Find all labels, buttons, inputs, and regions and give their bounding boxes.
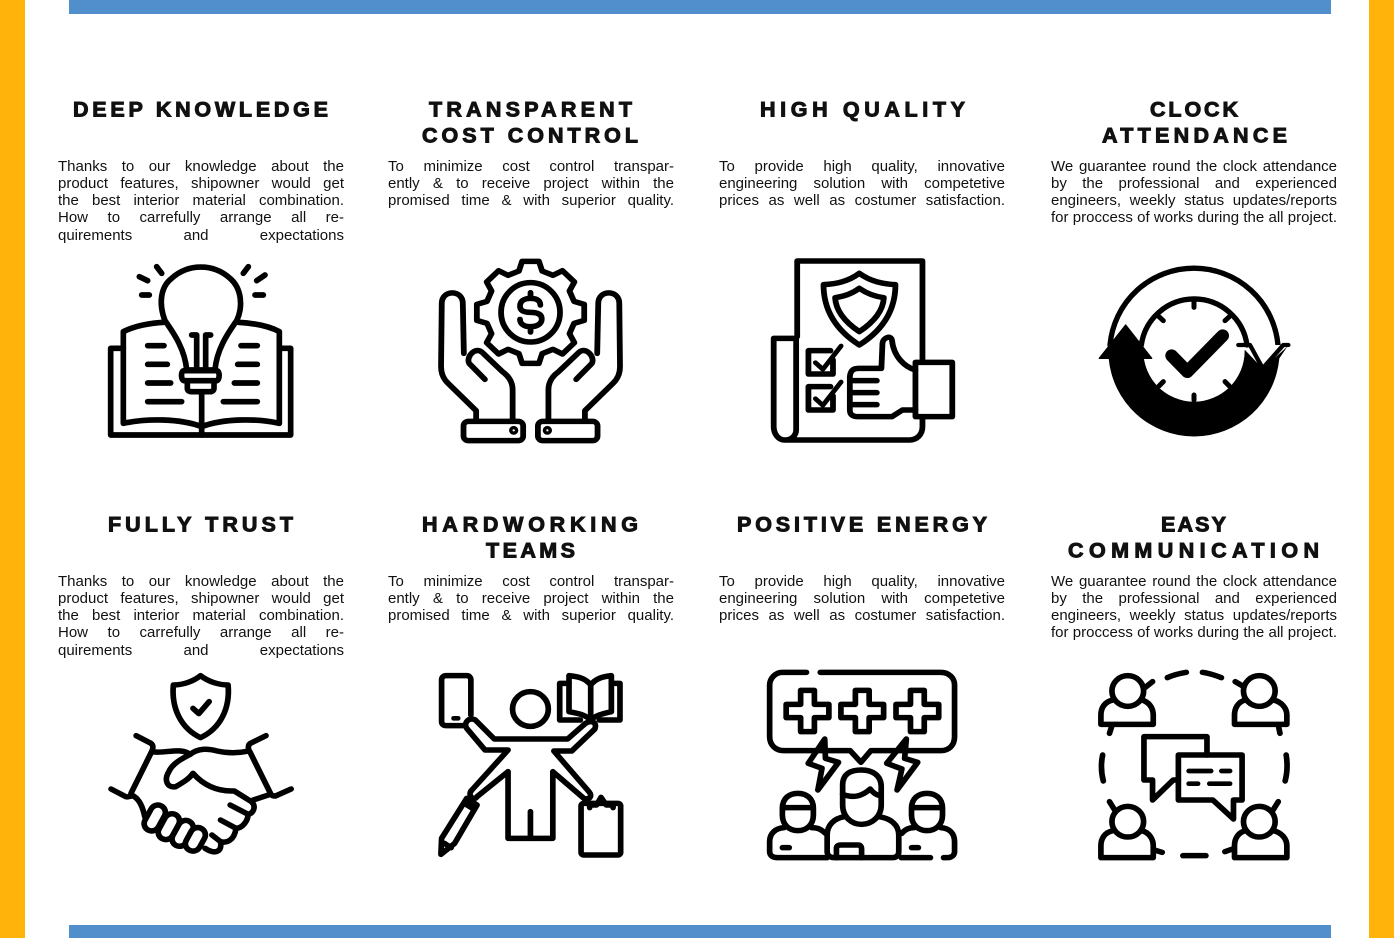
text: fully trust description: the best interior material combination.	[58, 607, 344, 624]
panel: easy communication	[1051, 513, 1337, 860]
text: positive energy description: To provide high quality, innovative	[719, 572, 1005, 590]
panel: transparent cost control	[388, 98, 674, 444]
icon: clock with check and circular arrows	[1098, 266, 1290, 436]
bottom blue band	[69, 925, 1331, 938]
heading: high quality: HIGH QUALITY	[760, 98, 965, 122]
panel: hardworking teams	[388, 513, 674, 858]
text: hardworking teams description: ently & to receive project within the	[388, 590, 674, 607]
heading: easy communication: EASY	[1161, 513, 1226, 537]
panel: clock attendance	[1051, 98, 1337, 436]
text: cost control description	[388, 158, 674, 209]
text: high quality description	[719, 158, 1005, 209]
icon: report with shield and thumbs up	[770, 258, 956, 443]
text: positive energy description: engineering solution with competetive	[719, 590, 1005, 607]
text: easy communication description: by the professional and experienced	[1051, 590, 1337, 607]
icon: handshake under shield	[108, 672, 294, 855]
left orange border	[0, 0, 25, 938]
panel: high quality	[719, 98, 1005, 443]
text: fully trust description: Thanks to our knowledge about the	[58, 572, 344, 590]
heading: transparent cost control	[422, 98, 638, 148]
text: fully trust description: product features, shipowner would get	[58, 590, 344, 607]
text: deep knowledge description: quirements and expectations	[58, 226, 344, 244]
heading: easy communication	[1068, 513, 1319, 563]
text: positive energy description: prices as well as costumer satisfaction.	[719, 607, 1005, 624]
icon: four people around chat bubbles	[1098, 670, 1290, 860]
text: hardworking teams description	[388, 572, 674, 624]
text: positive energy description	[719, 572, 1005, 624]
right orange border	[1369, 0, 1394, 938]
text: hardworking teams description: To minimize cost control transpar-	[388, 572, 674, 590]
heading: deep knowledge: DEEP KNOWLEDGE	[73, 98, 328, 122]
text: easy communication description: for proccess of works during the all project.	[1051, 624, 1337, 641]
text: fully trust description: quirements and expectations	[58, 642, 344, 658]
text: easy communication description: engineers, weekly status updates/reports	[1051, 607, 1337, 624]
text: high quality description: To provide high quality, innovative	[719, 158, 1005, 174]
heading: hardworking teams: TEAMS	[486, 539, 575, 563]
text: fully trust description: How to carrefully arrange all re-	[58, 624, 344, 641]
panel: positive energy	[719, 513, 1005, 860]
heading: clock attendance	[1102, 98, 1287, 148]
heading: transparent cost control: TRANSPARENT	[429, 98, 632, 122]
heading: easy communication: COMMUNICATION	[1068, 539, 1319, 563]
icon: hands holding dollar gear	[438, 258, 623, 444]
text: cost control description: To minimize cost control transpar-	[388, 158, 674, 174]
text: clock attendance description: for proccess of works during the all project.	[1051, 209, 1337, 226]
icon: light bulb over open book	[108, 264, 294, 438]
text: deep knowledge description: How to carrefully arrange all re-	[58, 209, 344, 226]
text: easy communication description: We guarantee round the clock attendance	[1051, 572, 1337, 590]
heading: fully trust: FULLY TRUST	[108, 513, 293, 537]
text: deep knowledge description: the best interior material combination.	[58, 192, 344, 209]
text: cost control description: promised time & with superior quality.	[388, 192, 674, 209]
text: high quality description: engineering solution with competetive	[719, 175, 1005, 192]
text: easy communication description	[1051, 572, 1337, 641]
panel: fully trust	[58, 513, 344, 855]
text: high quality description: prices as well as costumer satisfaction.	[719, 192, 1005, 209]
top blue band	[69, 0, 1331, 14]
text: cost control description: ently & to receive project within the	[388, 175, 674, 192]
icon: person with four arms and tools	[438, 672, 624, 858]
heading: hardworking teams	[422, 513, 638, 563]
text: hardworking teams description: promised time & with superior quality.	[388, 607, 674, 624]
text: clock attendance description	[1051, 158, 1337, 226]
heading: clock attendance: CLOCK	[1150, 98, 1238, 122]
text: clock attendance description: engineers, weekly status updates/reports	[1051, 192, 1337, 209]
text: deep knowledge description	[58, 158, 344, 244]
heading: clock attendance: ATTENDANCE	[1102, 124, 1287, 148]
text: deep knowledge description: Thanks to our knowledge about the	[58, 158, 344, 174]
heading: hardworking teams: HARDWORKING	[422, 513, 638, 537]
panel: deep knowledge	[58, 98, 344, 438]
text: clock attendance description: We guarantee round the clock attendance	[1051, 158, 1337, 174]
text: fully trust description	[58, 572, 344, 658]
text: clock attendance description: by the professional and experienced	[1051, 175, 1337, 192]
icon: team with plus signs speech bubble	[766, 670, 958, 860]
heading: positive energy: POSITIVE ENERGY	[737, 513, 987, 537]
heading: transparent cost control: COST CONTROL	[422, 124, 638, 148]
text: deep knowledge description: product features, shipowner would get	[58, 175, 344, 192]
